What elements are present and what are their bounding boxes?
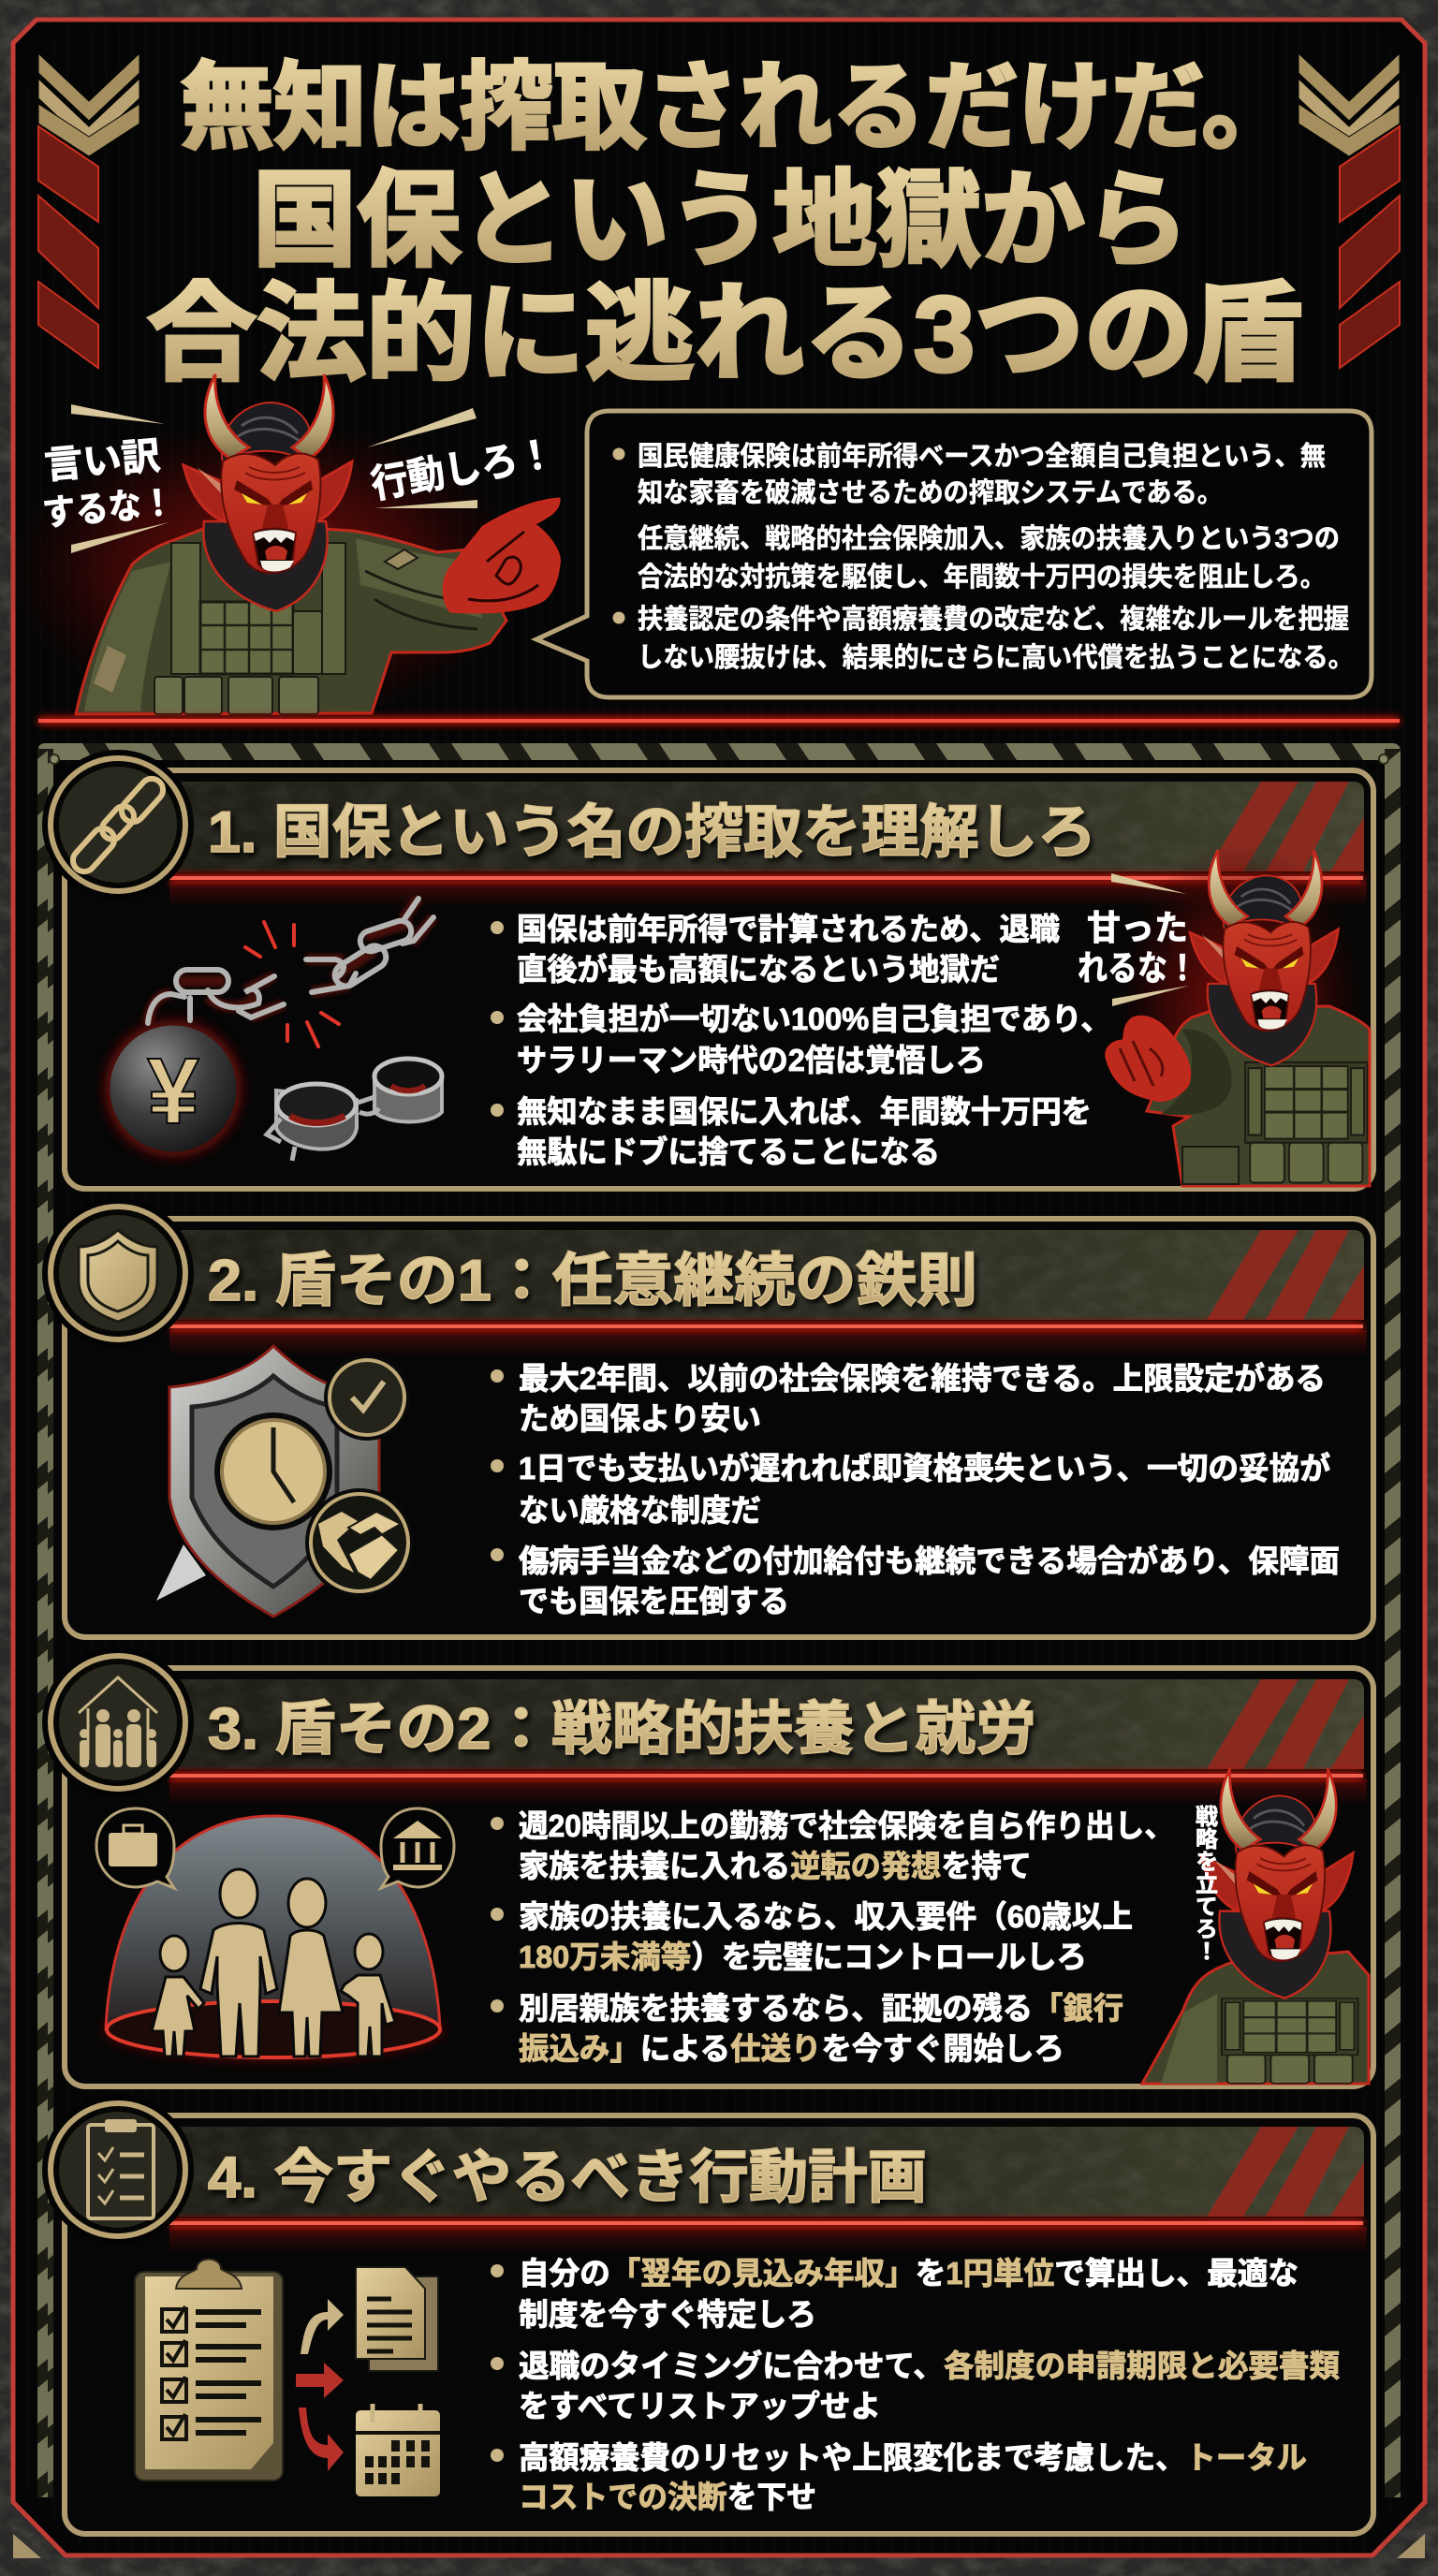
illustration: broken chain and iron ball <box>104 899 442 1161</box>
heading: 2. 盾その1：任意継続の鉄則 <box>208 1249 977 1313</box>
speech box: summary: 合法的な対抗策を駆使し、年間数十万円の損失を阻止しろ。 <box>638 562 1326 593</box>
shout: 言い訳するな: するな！ <box>41 483 176 534</box>
bullet list <box>491 912 1111 1169</box>
illustration: family under dome <box>103 1816 444 2061</box>
speech box: summary: 扶養認定の条件や高額療養費の改定など、複雑なルールを把握 <box>638 604 1349 635</box>
icon: chain badge <box>68 774 168 876</box>
bullet list: 180万未満等）を完璧にコントロールしろ <box>519 1939 1087 1974</box>
bullet list <box>491 2256 1340 2514</box>
illustration: checklist <box>135 2260 283 2481</box>
panel 1 <box>42 750 1373 1189</box>
shout: 甘ったれるな: 甘った <box>1087 909 1188 947</box>
bullet list: でも国保を圧倒する <box>519 1584 789 1618</box>
arrow: to calendar <box>299 2408 344 2471</box>
heading: 1. 国保という名の搾取を理解しろ <box>208 800 1096 865</box>
icon: document stack <box>356 2267 438 2371</box>
icon: clipboard badge <box>88 2119 154 2218</box>
bullet list: 家族の扶養に入るなら、収入要件（60歳以上 <box>519 1899 1133 1934</box>
bullet list: サラリーマン時代の2倍は覚悟しろ <box>517 1043 986 1077</box>
hazard frame around sections <box>37 743 1401 2497</box>
icon: calendar <box>356 2404 440 2496</box>
shout: 甘ったれるな <box>1078 873 1197 1006</box>
bullet list: 高額療養費のリセットや上限変化まで考慮した、トータル <box>519 2440 1307 2475</box>
bullet list: ない厳格な制度だ <box>519 1493 761 1528</box>
panel frame and header <box>42 750 1373 1189</box>
shout: 甘ったれるな: れるな！ <box>1078 949 1197 988</box>
arrow: to documents <box>301 2299 344 2354</box>
bullet list: 自分の「翌年の見込み年収」を1円単位で算出し、最適な <box>519 2256 1299 2291</box>
shout: 言い訳するな: 言い訳 <box>42 434 162 487</box>
panel frame and header <box>42 1198 1373 1637</box>
speech box: summary: 国民健康保険は前年所得ベースかつ全額自己負担という、無 <box>638 441 1326 472</box>
bullet list: 無駄にドブに捨てることになる <box>517 1134 940 1169</box>
panel 2 <box>42 1198 1373 1637</box>
illustration: broken chain and iron ball: ¥ <box>147 1039 199 1144</box>
title <box>147 54 1303 394</box>
bullet list: 最大2年間、以前の社会保険を維持できる。上限設定がある <box>519 1361 1326 1396</box>
speech box: summary: しない腰抜けは、結果的にさらに高い代償を払うことになる。 <box>638 642 1354 673</box>
bullet list: 傷病手当金などの付加給付も継続できる場合があり、保障面 <box>519 1544 1340 1578</box>
bullet list: 家族を扶養に入れる逆転の発想を持て <box>519 1849 1032 1883</box>
bullet list: 1日でも支払いが遅れれば即資格喪失という、一切の妥協が <box>519 1451 1330 1486</box>
bullet list: 週20時間以上の勤務で社会保険を自ら作り出し、 <box>519 1808 1174 1843</box>
bullet list: 直後が最も高額になるという地獄だ <box>517 952 1000 987</box>
speech box: summary: 知な家畜を破滅させるための搾取システムである。 <box>638 477 1223 508</box>
speech box: summary <box>536 411 1372 697</box>
speech box: summary: 任意継続、戦略的社会保険加入、家族の扶養入りという3つの <box>638 523 1340 554</box>
decoration: right chevrons and red slashes <box>1299 53 1400 368</box>
panel frame and header <box>42 1647 1373 2086</box>
illustration: shield with clock and handshake <box>156 1346 414 1617</box>
decoration: left chevrons and red slashes <box>38 53 139 368</box>
heading: 4. 今すぐやるべき行動計画 <box>208 2145 927 2210</box>
bullet list: ため国保より安い <box>519 1401 761 1436</box>
corner triangles <box>13 2534 1425 2558</box>
character: angry devil <box>1142 1768 1369 2084</box>
bullet list: 振込み」による仕送りを今すぐ開始しろ <box>519 2031 1064 2066</box>
bullet list: 制度を今すぐ特定しろ <box>519 2297 816 2332</box>
red divider <box>38 717 1400 724</box>
bullet list: 無知なまま国保に入れば、年間数十万円を <box>517 1094 1092 1129</box>
title: 国保という地獄から <box>253 162 1189 279</box>
bullet list: 会社負担が一切ない100%自己負担であり、 <box>517 1002 1111 1036</box>
bullet list: 別居親族を扶養するなら、証拠の残る「銀行 <box>519 1991 1123 2026</box>
bullet list: 退職のタイミングに合わせて、各制度の申請期限と必要書類 <box>519 2349 1340 2383</box>
title: 無知は搾取されるだけだ。 <box>181 54 1295 161</box>
character: pointing devil with red glow <box>5 374 559 725</box>
panel frame and header <box>42 2095 1373 2534</box>
bullet list: 国保は前年所得で計算されるため、退職 <box>517 912 1060 946</box>
icon: shield badge <box>79 1230 157 1322</box>
bullet list: をすべてリストアップせよ <box>519 2389 881 2423</box>
arrow: red straight <box>296 2363 344 2398</box>
bullet list <box>491 1361 1340 1618</box>
bullet list: コストでの決断を下せ <box>519 2480 816 2514</box>
character: devil pointing at viewer <box>1107 842 1370 1186</box>
title: 合法的に逃れる3つの盾 <box>147 275 1303 394</box>
icon: bank bubble <box>381 1808 454 1888</box>
shout: 行動しろ: 行動しろ！ <box>368 431 558 506</box>
bullet list <box>491 1808 1174 2066</box>
icon: briefcase bubble <box>96 1808 174 1888</box>
panel 3 <box>42 1647 1373 2086</box>
panel 4 <box>42 2095 1373 2534</box>
shout: 戦略を立てろ vertical: 戦略を立てろ！ <box>1191 1805 1217 1962</box>
icon: house and family badge <box>79 1677 157 1767</box>
heading: 3. 盾その2：戦略的扶養と就労 <box>208 1697 1036 1762</box>
shout: 言い訳するな <box>41 404 176 553</box>
